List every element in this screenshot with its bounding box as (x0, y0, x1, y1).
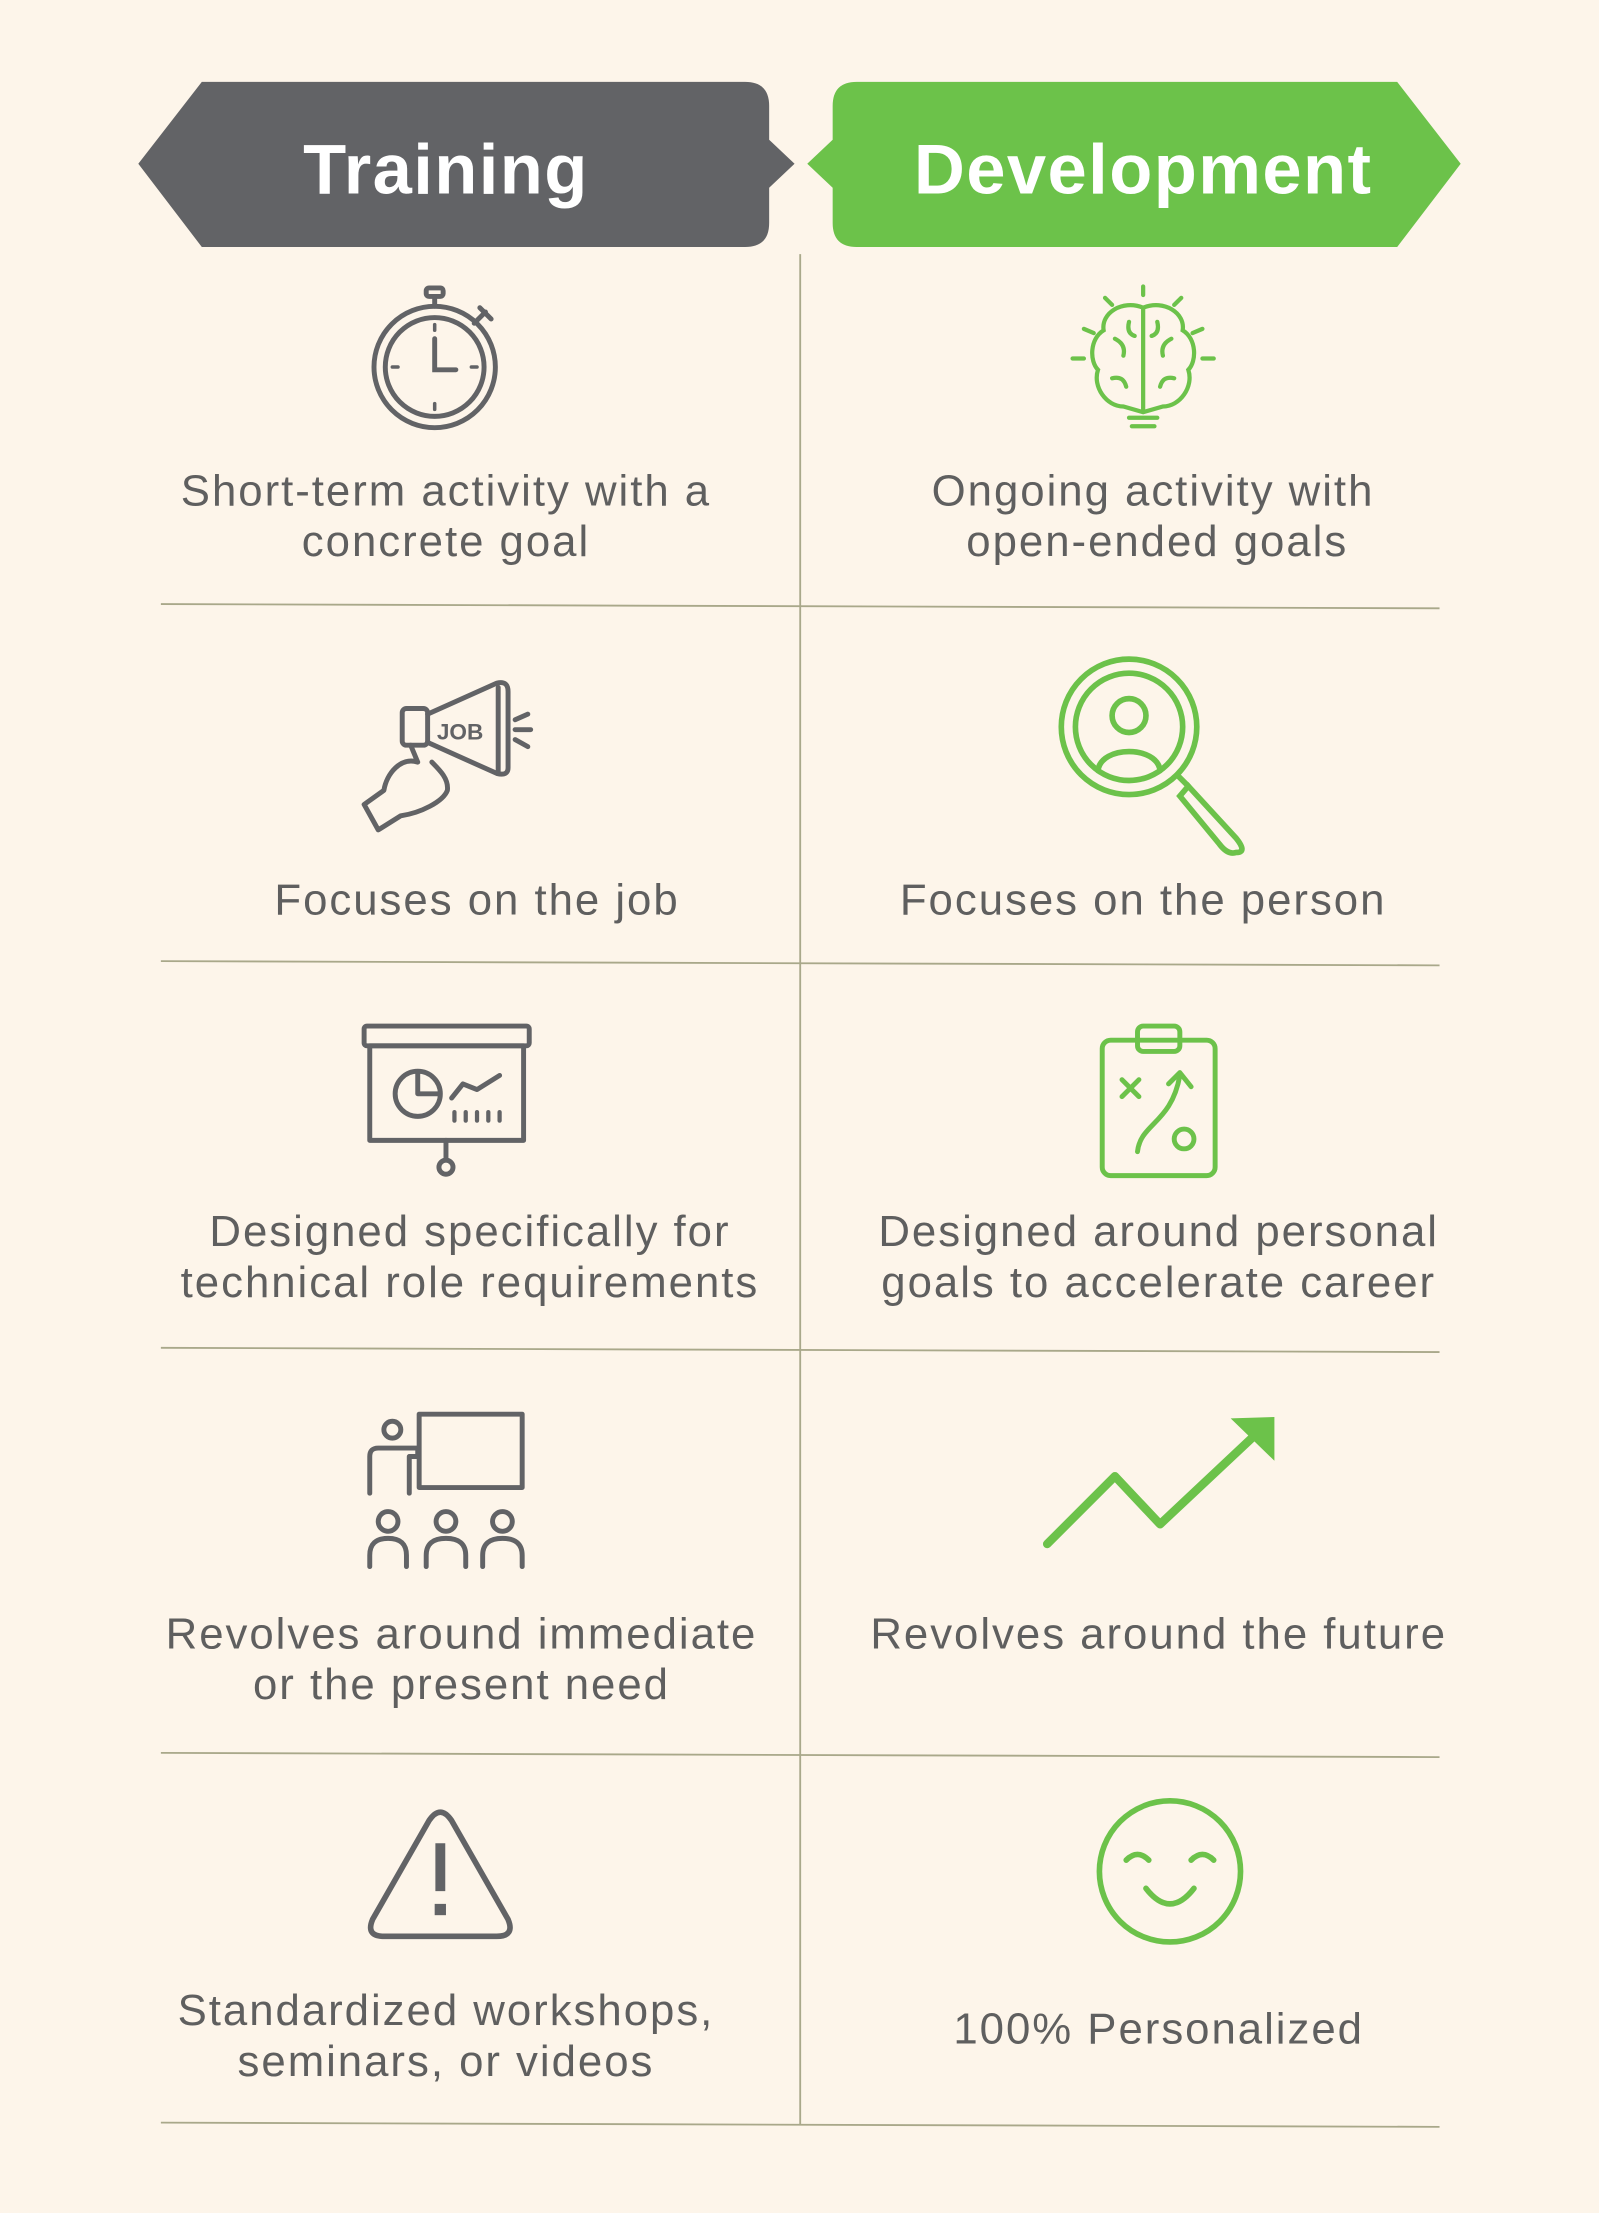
text: focuses person: Focuses on the person (900, 876, 1386, 925)
text: revolves present: or the present need (253, 1660, 670, 1709)
text: personalized: 100% Personalized (953, 2005, 1364, 2054)
text: revolves present: Revolves around immediate (166, 1609, 757, 1658)
text: ongoing: open-ended goals (966, 517, 1348, 566)
text: designed personal: goals to accelerate career (881, 1258, 1436, 1307)
header: Development (807, 82, 1461, 247)
icon: magnifier person (1061, 659, 1242, 853)
icon: warning (371, 1812, 510, 1936)
text: designed personal: Designed around personal (878, 1207, 1439, 1256)
text: revolves future: Revolves around the future (870, 1609, 1447, 1658)
text: focuses job: Focuses on the job (274, 876, 680, 925)
icon: smiley (1099, 1801, 1241, 1942)
icon: teacher audience (370, 1414, 522, 1567)
icon: megaphone (364, 683, 531, 830)
text: short-term: concrete goal (302, 517, 590, 566)
icon: brain (1073, 287, 1214, 426)
icon: trend arrow (1047, 1417, 1274, 1544)
text: standardized: Standardized workshops, (178, 1986, 714, 2035)
text: standardized: seminars, or videos (238, 2037, 654, 2086)
icon: megaphone: JOB (437, 720, 483, 745)
icon: clipboard (1102, 1026, 1215, 1176)
header: Development: Development (914, 129, 1372, 208)
icon: presentation board (364, 1026, 529, 1174)
icon: stopwatch (374, 288, 495, 428)
text: designed technical: Designed specifically for (209, 1207, 731, 1256)
header: Training: Training (303, 129, 589, 208)
text: short-term: Short-term activity with a (181, 466, 711, 515)
text: ongoing: Ongoing activity with (932, 466, 1374, 515)
text: designed technical: technical role requirements (181, 1258, 759, 1307)
header: Training (138, 82, 795, 247)
